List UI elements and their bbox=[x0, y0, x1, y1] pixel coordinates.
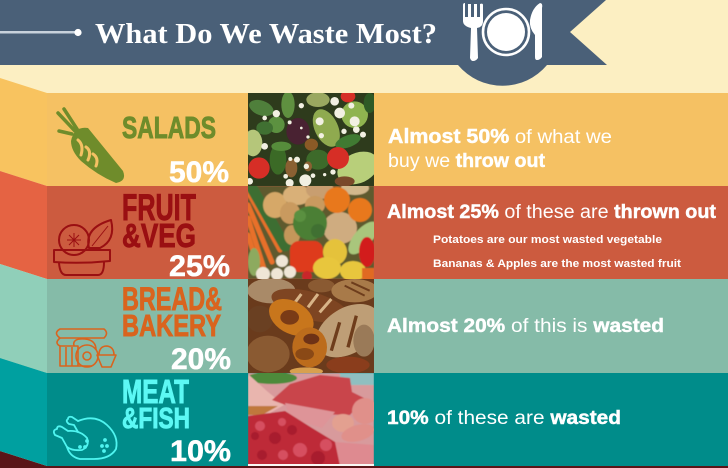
heading: fruit and veg: FRUIT bbox=[122, 187, 196, 228]
title decoration line bbox=[0, 29, 82, 36]
photo: bread bbox=[248, 279, 374, 373]
icon: plate and cutlery bbox=[463, 3, 542, 61]
text: potatoes note: Potatoes are our most wasted vegetable bbox=[433, 234, 662, 246]
text: fruit and veg stat bbox=[387, 202, 717, 270]
panel: meat and fish bbox=[0, 358, 728, 468]
text: salads stat: buy we throw out bbox=[388, 151, 546, 172]
panel: fruit and veg bbox=[0, 171, 728, 283]
icon: chicken bbox=[54, 417, 117, 459]
heading: salads: SALADS bbox=[122, 110, 216, 145]
heading: meat and fish: &FISH bbox=[122, 403, 190, 435]
panel: salads bbox=[0, 78, 728, 191]
heading: bread and bakery: BAKERY bbox=[122, 308, 221, 343]
icon: fruit bowl bbox=[54, 220, 112, 275]
text: meat stat: 10% of these are wasted bbox=[387, 408, 621, 429]
text: fruit and veg stat: Almost 25% of these are thrown out bbox=[387, 202, 717, 223]
icon: carrot bbox=[58, 109, 124, 183]
bottom dark base bbox=[0, 451, 728, 468]
photo: meat bbox=[247, 372, 378, 468]
stat: 25%: 25% bbox=[169, 250, 230, 283]
text: salads stat bbox=[388, 126, 612, 172]
heading: meat and fish bbox=[122, 373, 190, 435]
heading: bread and bakery bbox=[122, 281, 222, 343]
icon: bakery bbox=[56, 329, 116, 367]
panel: bread and bakery bbox=[0, 264, 728, 376]
text: bread stat: Almost 20% of this is wasted bbox=[387, 316, 664, 337]
stat: 10%: 10% bbox=[170, 435, 231, 468]
stat: 50%: 50% bbox=[169, 156, 229, 189]
photo: salad bbox=[248, 93, 374, 186]
heading: meat and fish: MEAT bbox=[122, 373, 189, 410]
heading: fruit and veg: &VEG bbox=[122, 217, 196, 254]
heading: bread and bakery: BREAD& bbox=[122, 281, 222, 317]
title: What Do We Waste Most? bbox=[95, 19, 437, 50]
photo: vegetables bbox=[248, 186, 374, 279]
heading: fruit and veg bbox=[122, 187, 196, 254]
text: salads stat: Almost 50% of what we bbox=[388, 126, 612, 148]
stat: 20%: 20% bbox=[171, 343, 231, 376]
title banner bbox=[0, 0, 607, 86]
text: bananas note: Bananas & Apples are the most wasted fruit bbox=[433, 258, 681, 270]
